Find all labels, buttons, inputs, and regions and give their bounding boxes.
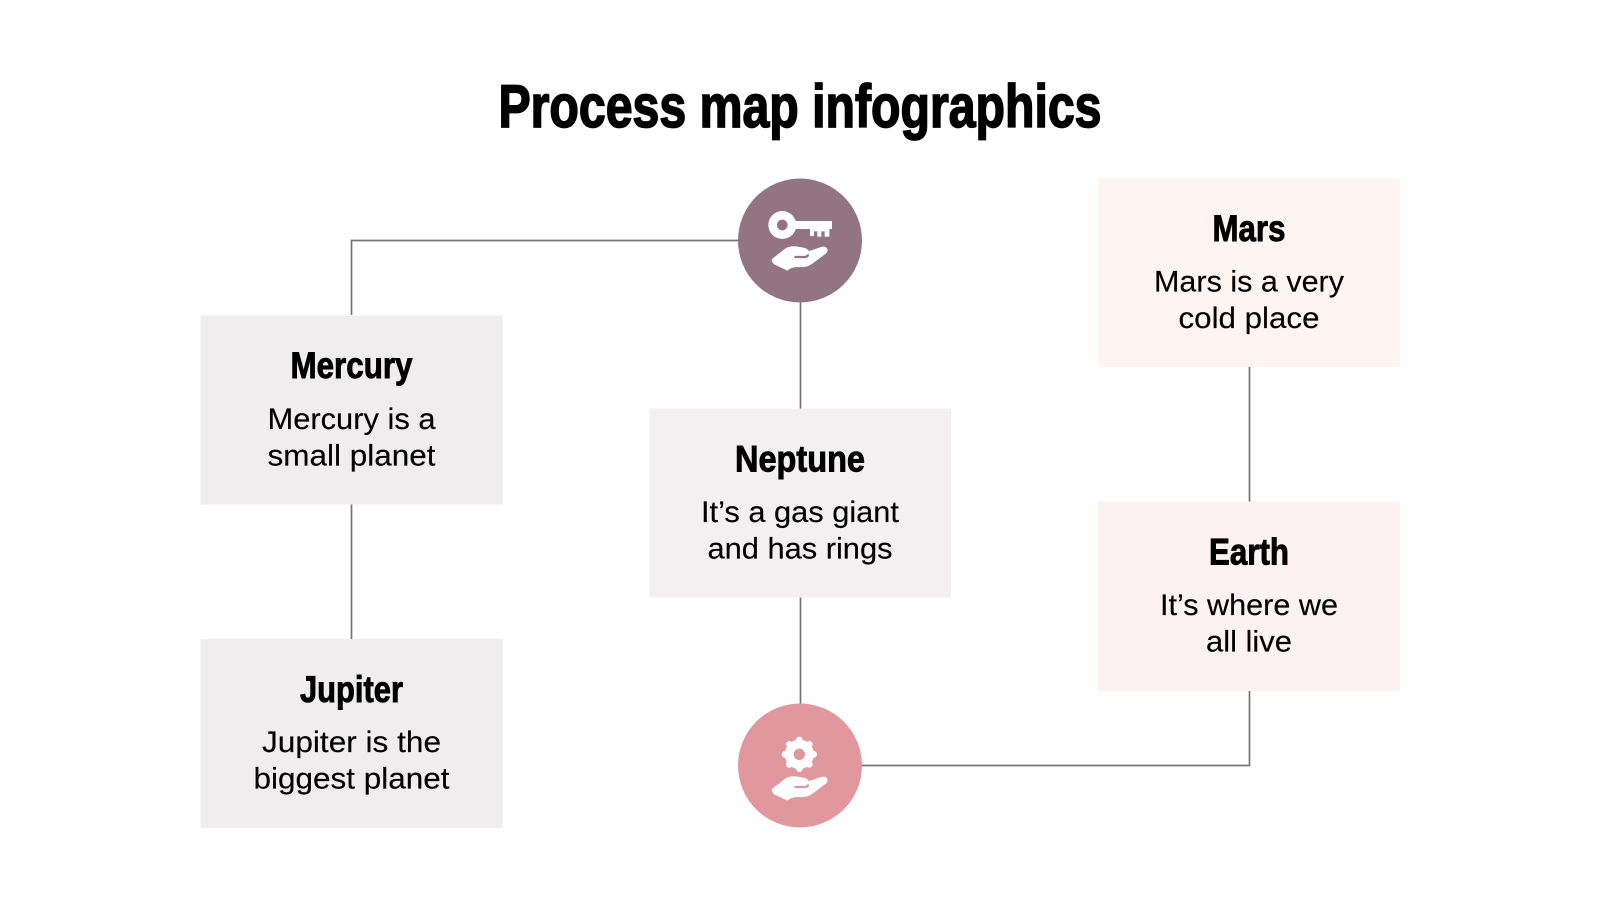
icon: open hand [772, 777, 827, 800]
panel: Mars [1098, 178, 1400, 367]
icon circle: gear in hand [738, 704, 862, 828]
icon circle: key in hand [738, 178, 862, 302]
text: Earth description: all live [1206, 626, 1292, 658]
icon: gear [782, 737, 817, 772]
text: Jupiter description [254, 726, 450, 796]
heading: Mars: Mars [1212, 208, 1286, 249]
icon: open hand [772, 247, 827, 270]
text: Neptune description: and has rings [708, 532, 892, 566]
text: Neptune description [701, 496, 899, 566]
text: Neptune description: It’s a gas giant [701, 496, 899, 529]
connector: Mercury to key circle [352, 240, 738, 315]
text: Earth description [1160, 589, 1338, 658]
icon: key [768, 211, 832, 239]
panel: Earth [1098, 502, 1400, 691]
text: Mars description: Mars is a very [1154, 266, 1344, 298]
connector: Neptune to gear circle [800, 597, 802, 704]
text: Mercury description: Mercury is a [268, 403, 436, 436]
connector: Earth to Mars [1248, 367, 1250, 502]
heading: Neptune: Neptune [735, 438, 865, 480]
connector: Mercury to Jupiter [350, 504, 352, 639]
heading: Jupiter: Jupiter [300, 669, 403, 710]
text: Mars description [1154, 266, 1344, 335]
heading: Earth: Earth [1209, 532, 1289, 572]
text: Earth description: It’s where we [1160, 589, 1338, 622]
connector: gear circle to Earth [862, 691, 1250, 766]
text: Jupiter description: Jupiter is the [262, 726, 441, 759]
heading: Mercury: Mercury [290, 345, 413, 386]
panel: Jupiter [200, 639, 502, 828]
title: Process map infographics [498, 73, 1102, 140]
text: Mercury description [268, 403, 436, 472]
panel: Mercury [200, 316, 502, 504]
connector: key circle to Neptune [800, 302, 802, 408]
panel: Neptune [650, 408, 951, 598]
text: Jupiter description: biggest planet [254, 762, 450, 796]
text: Mars description: cold place [1178, 302, 1320, 335]
text: Mercury description: small planet [268, 440, 436, 472]
